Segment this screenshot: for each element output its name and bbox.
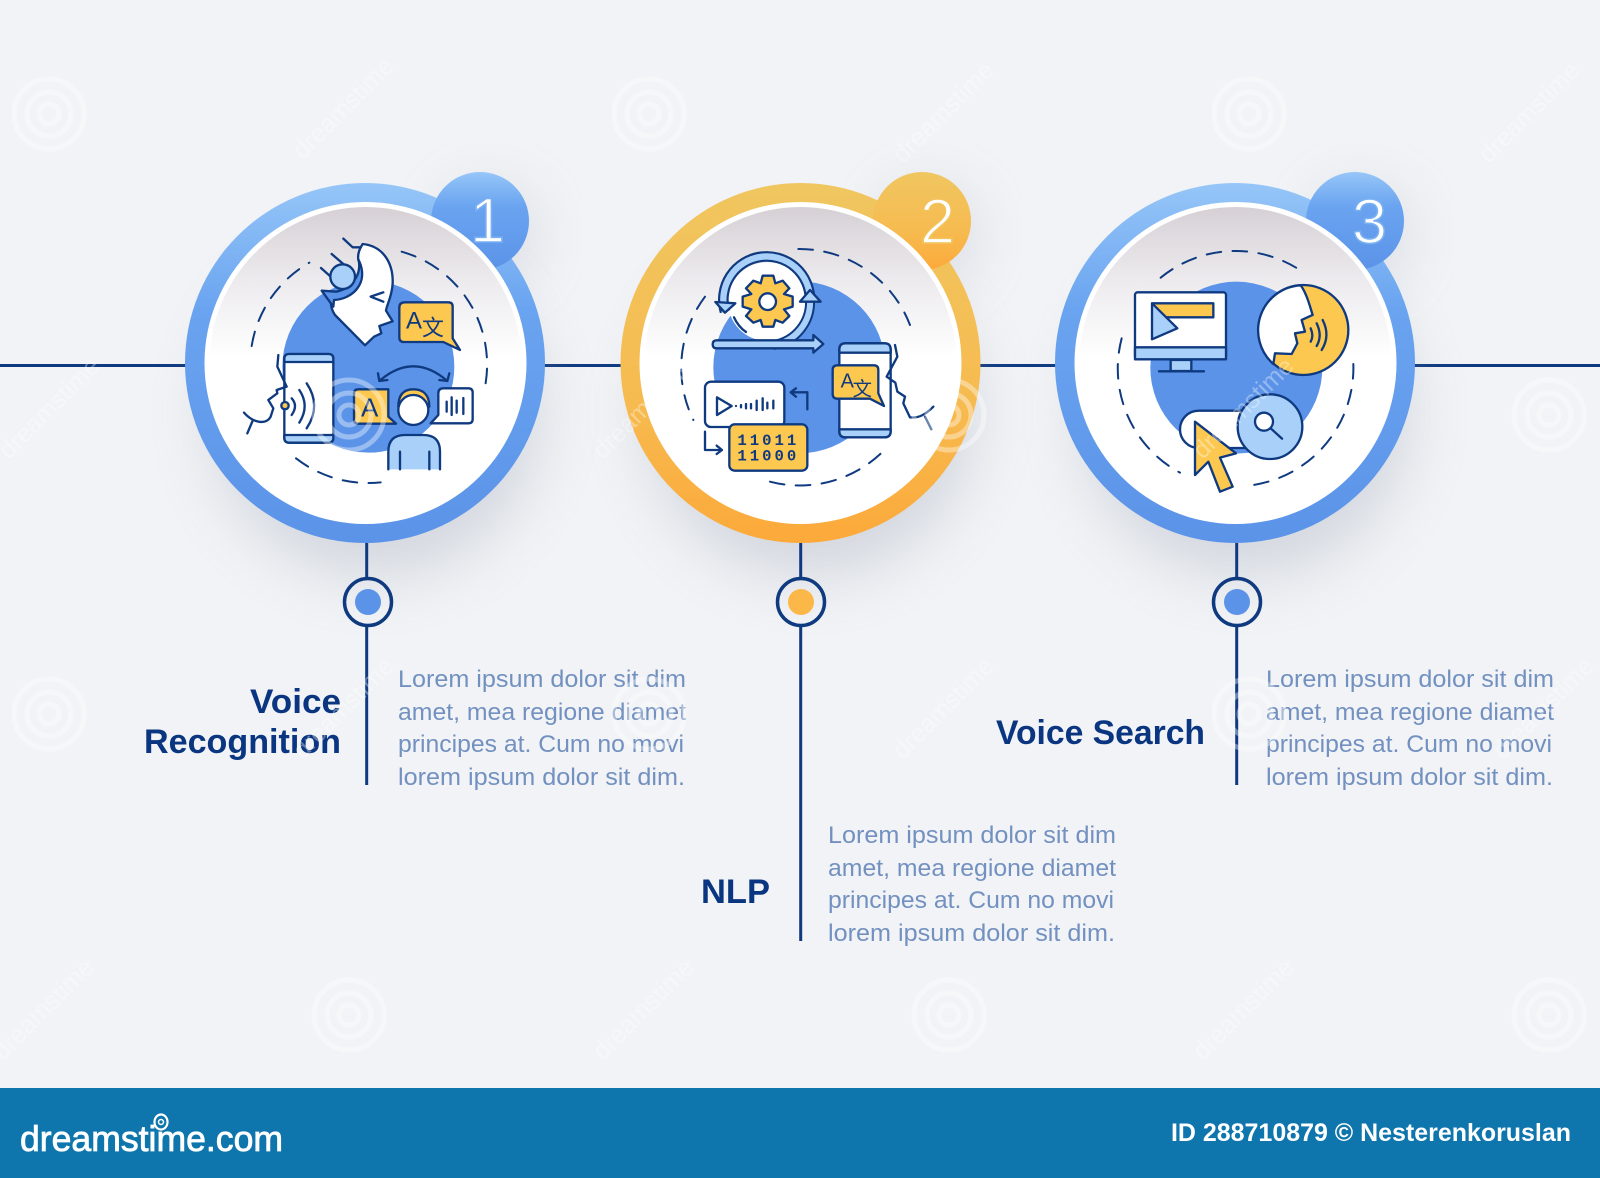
- watermark text: dreamstime: [1187, 352, 1299, 464]
- text block: step 1 description: [398, 666, 686, 791]
- watermark text: dreamstime: [887, 652, 999, 764]
- number badge 1: [431, 172, 529, 270]
- icon: voice recognition: A: [361, 393, 379, 423]
- heading: Voice Search: Voice Search: [996, 714, 1205, 752]
- connector and marker: step 3: [1214, 543, 1260, 785]
- text block: step 1 description: lorem ipsum dolor sit dim.: [398, 764, 685, 791]
- text block: step 2 description: [828, 822, 1116, 947]
- number badge 2: 2: [920, 187, 955, 257]
- heading: NLP: NLP: [701, 873, 770, 911]
- number badge 2: [873, 172, 971, 270]
- watermark text: dreamstime: [587, 953, 699, 1065]
- panel: step 3 circle: [1055, 172, 1415, 577]
- number badge 3: [1306, 172, 1404, 270]
- watermark text: dreamstime: [1487, 652, 1599, 764]
- text block: step 2 description: Lorem ipsum dolor sit dim: [828, 822, 1116, 849]
- text block: step 3 description: Lorem ipsum dolor sit dim: [1266, 666, 1554, 693]
- watermark text: dreamstime: [1473, 56, 1585, 168]
- icon: natural language processing: A: [841, 370, 855, 392]
- text block: step 1 description: principes at. Cum no movi: [398, 731, 684, 758]
- icon: natural language processing: [681, 249, 933, 485]
- text block: step 2 description: lorem ipsum dolor sit dim.: [828, 920, 1115, 947]
- panel: step 2 circle: [620, 172, 980, 577]
- horizontal timeline line: [0, 364, 1600, 367]
- heading: Voice Recognition: Recognition: [144, 723, 341, 761]
- icon: natural language processing: 文: [853, 378, 872, 400]
- text block: step 3 description: lorem ipsum dolor sit dim.: [1266, 764, 1553, 791]
- heading: Voice Recognition: Voice: [250, 683, 341, 721]
- heading: Voice Recognition: [144, 683, 341, 761]
- icon: voice recognition: A: [406, 308, 422, 335]
- icon: voice recognition: 文: [422, 315, 444, 340]
- icon: voice recognition: [244, 239, 487, 483]
- watermark text: dreamstime: [1187, 953, 1299, 1065]
- icon: natural language processing: 11000: [737, 448, 799, 466]
- number badge 3: 3: [1352, 187, 1387, 257]
- text block: step 3 description: [1266, 666, 1554, 791]
- icon: voice search: [1118, 251, 1353, 492]
- watermark text: dreamstime: [287, 652, 399, 764]
- text block: step 2 description: principes at. Cum no movi: [828, 887, 1114, 914]
- watermark text: dreamstime: [887, 56, 999, 168]
- footer logo: dreamstime.com: [20, 1118, 283, 1159]
- connector and marker: step 1: [344, 543, 392, 785]
- number badge 1: 1: [470, 186, 505, 256]
- text block: step 3 description: principes at. Cum no movi: [1266, 731, 1552, 758]
- footer credit: ID 288710879 © Nesterenkoruslan: [1171, 1119, 1571, 1147]
- watermark text: dreamstime: [587, 352, 699, 464]
- text block: step 2 description: amet, mea regione diamet: [828, 855, 1116, 882]
- footer bar: [0, 1088, 1600, 1178]
- watermark text: dreamstime: [287, 52, 399, 164]
- text block: step 1 description: amet, mea regione diamet: [398, 699, 686, 726]
- connector and marker: step 2: [778, 543, 824, 941]
- panel: step 1 circle: [185, 172, 545, 577]
- text block: step 3 description: amet, mea regione diamet: [1266, 699, 1554, 726]
- text block: step 1 description: Lorem ipsum dolor sit dim: [398, 666, 686, 693]
- icon: natural language processing: 11011: [737, 432, 799, 450]
